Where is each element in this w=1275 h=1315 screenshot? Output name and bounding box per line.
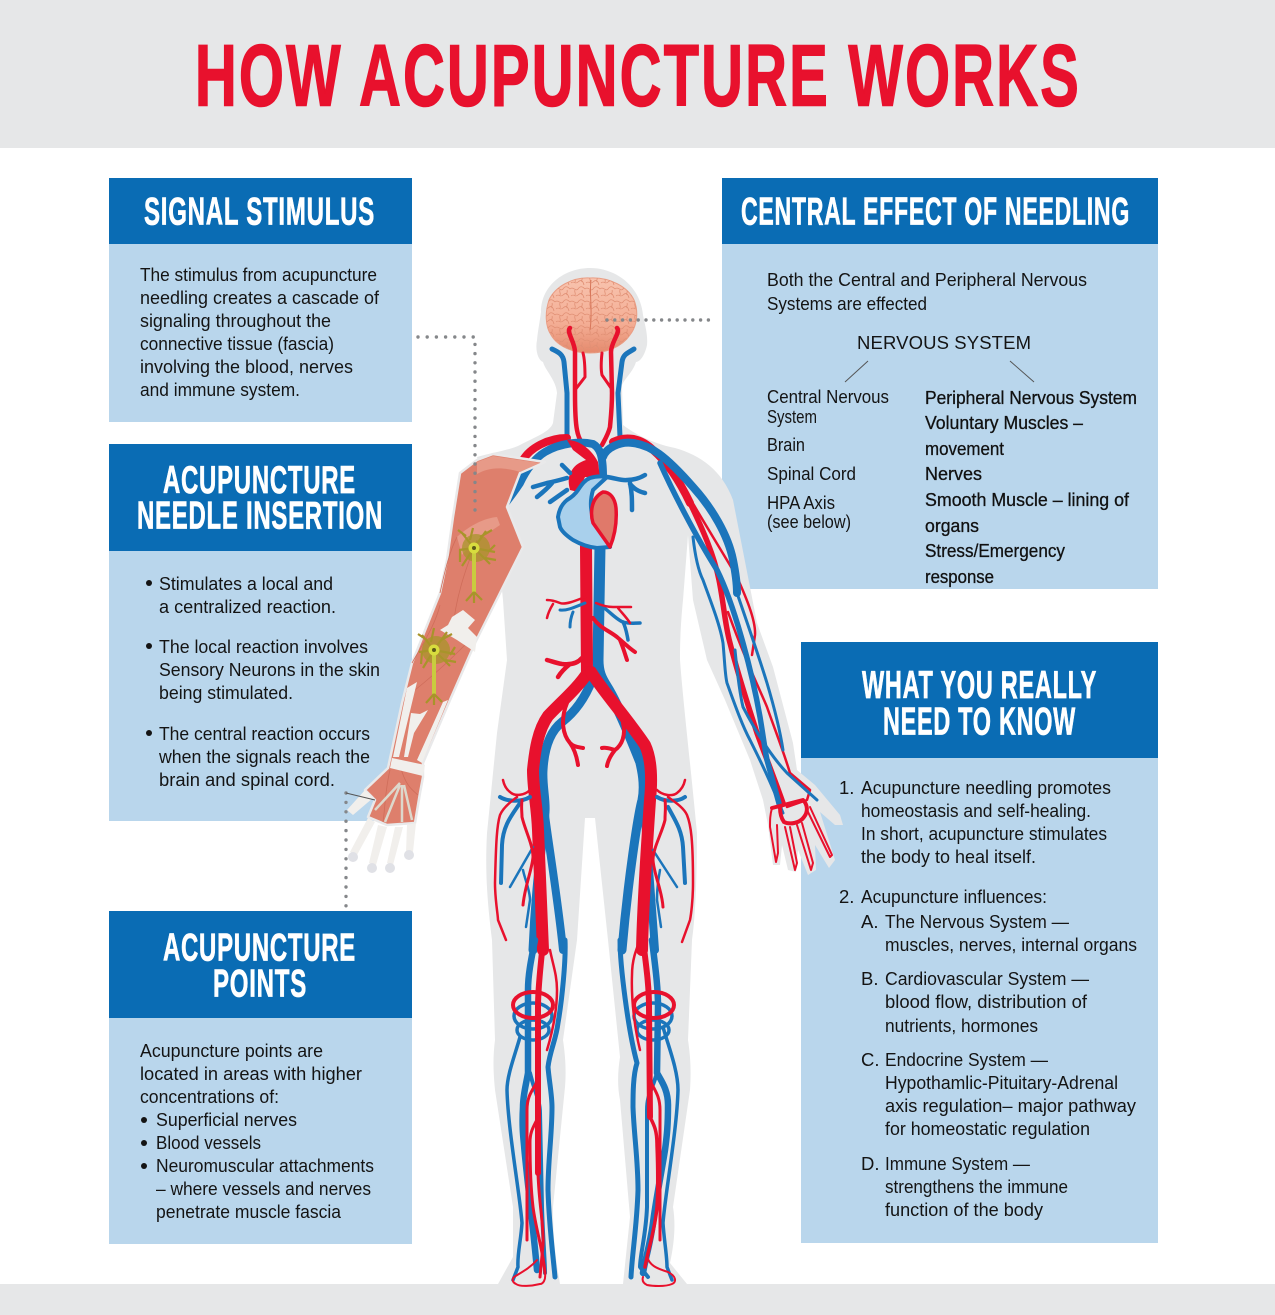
right arm blood vessels	[603, 438, 817, 813]
peripheral nervous system column: Voluntary Muscles –	[925, 412, 1084, 433]
panel body	[722, 244, 1158, 589]
numbered point 1	[839, 777, 1111, 867]
muscle silhouette	[365, 454, 545, 825]
peripheral nervous system column	[925, 387, 1137, 587]
text block: located in areas with higher	[140, 1063, 362, 1084]
text block: Acupuncture points are	[140, 1040, 323, 1061]
heading: SIGNAL STIMULUS	[144, 190, 375, 234]
text block	[140, 264, 380, 400]
central nervous system column: System	[767, 406, 817, 427]
peripheral nervous system column: Peripheral Nervous System	[925, 387, 1137, 408]
text block: – where vessels and nerves	[156, 1178, 371, 1199]
panel: signal stimulus	[109, 178, 412, 422]
peripheral nervous system column: Nerves	[925, 463, 982, 484]
diagram branch lines	[845, 361, 1034, 382]
numbered point 2: The Nervous System —	[885, 911, 1069, 932]
muscle fibre lines	[383, 537, 477, 822]
text block: concentrations of:	[140, 1086, 279, 1107]
right hand blood vessels	[770, 800, 832, 870]
numbered point 2: A.	[861, 911, 878, 932]
heading: NEED TO KNOW	[883, 700, 1076, 744]
panel body	[109, 1018, 412, 1244]
numbered point 2: nutrients, hormones	[885, 1015, 1038, 1036]
bullet list: Stimulates a local and	[159, 573, 333, 594]
numbered point 2: axis regulation– major pathway	[885, 1095, 1137, 1116]
numbered point 2: muscles, nerves, internal organs	[885, 934, 1137, 955]
nervous system diagram heading: NERVOUS SYSTEM	[857, 332, 1031, 353]
neck and head blood vessels	[552, 328, 634, 445]
numbered point 2: blood flow, distribution of	[885, 991, 1088, 1012]
numbered point 2: Acupuncture influences:	[861, 886, 1047, 907]
central nervous system column: Brain	[767, 434, 805, 455]
panel body	[801, 758, 1158, 1243]
numbered point 2: strengthens the immune	[885, 1176, 1068, 1197]
text block: and immune system.	[140, 379, 300, 400]
left ventricle	[592, 492, 616, 547]
heading	[163, 926, 356, 1006]
intro text: Systems are effected	[767, 293, 927, 314]
peripheral nervous system column: response	[925, 566, 994, 587]
text block: needling creates a cascade of	[140, 287, 380, 308]
numbered point 2: 2.	[839, 886, 854, 907]
abdominal and pelvic blood vessels	[533, 672, 655, 950]
heading: WHAT YOU REALLY	[862, 664, 1097, 707]
panel header bar	[801, 642, 1158, 758]
pulmonary veins	[533, 465, 645, 510]
aorta	[567, 440, 600, 492]
heading	[137, 459, 383, 538]
bullet list: a centralized reaction.	[159, 596, 336, 617]
bullet list: The local reaction involves	[159, 636, 368, 657]
numbered point 2: C.	[861, 1049, 880, 1070]
dotted connector: acupuncture points to hand	[346, 793, 375, 907]
panel: acupuncture points	[109, 911, 412, 1244]
central nervous system column: HPA Axis	[767, 492, 835, 513]
forearm tendons	[393, 682, 448, 763]
central nervous system column: Central Nervous	[767, 386, 889, 407]
thigh blood vessels	[495, 780, 693, 942]
numbered point 2: B.	[861, 968, 878, 989]
peripheral nervous system column: movement	[925, 438, 1004, 459]
text block: involving the blood, nerves	[140, 356, 353, 377]
numbered point 1: Acupuncture needling promotes	[861, 777, 1111, 798]
panel body	[109, 551, 412, 821]
bullet list: brain and spinal cord.	[159, 769, 335, 790]
fingertips	[348, 850, 414, 873]
panel header bar	[722, 178, 1158, 244]
torso blood vessels	[500, 438, 640, 760]
numbered point 2: function of the body	[885, 1199, 1044, 1220]
left leg blood vessels	[507, 940, 565, 1286]
human body illustration	[347, 268, 843, 1286]
elbow tendon	[440, 610, 477, 652]
text block: Neuromuscular attachments	[156, 1155, 374, 1176]
top banner background	[0, 0, 1275, 148]
central nervous system column	[767, 386, 889, 532]
heading: NEEDLE INSERTION	[137, 494, 383, 538]
heading: ACUPUNCTURE	[163, 926, 356, 970]
numbered point 1: homeostasis and self-healing.	[861, 800, 1091, 821]
panel: what you really need to know	[801, 642, 1158, 1243]
bottom band	[0, 1284, 1275, 1315]
central nervous system column: Spinal Cord	[767, 463, 856, 484]
wrist band	[390, 758, 425, 776]
muscular arm	[347, 454, 545, 873]
numbered point 2: D.	[861, 1153, 880, 1174]
icon: lower neuron	[418, 628, 456, 705]
numbered point 1: In short, acupuncture stimulates	[861, 823, 1107, 844]
heading: ACUPUNCTURE	[163, 459, 356, 502]
dotted connector: central effect to brain	[607, 318, 712, 322]
palm tendons	[375, 783, 412, 822]
panel body	[109, 244, 412, 422]
text block	[140, 1040, 374, 1222]
heading	[862, 664, 1097, 744]
panel header bar	[109, 178, 412, 244]
icon: brain	[546, 278, 637, 353]
text block: signaling throughout the	[140, 310, 331, 331]
right leg blood vessels	[620, 940, 678, 1286]
panel: acupuncture needle insertion	[109, 444, 412, 821]
text block: The stimulus from acupuncture	[140, 264, 377, 285]
numbered point 1: the body to heal itself.	[861, 846, 1036, 867]
peripheral nervous system column: organs	[925, 515, 979, 536]
right chambers	[558, 476, 610, 548]
text block: penetrate muscle fascia	[156, 1201, 342, 1222]
panel header bar	[109, 444, 412, 551]
text block: connective tissue (fascia)	[140, 333, 334, 354]
text block: Blood vessels	[156, 1132, 261, 1153]
body silhouette	[477, 268, 843, 1284]
intro text: Both the Central and Peripheral Nervous	[767, 269, 1087, 290]
bullet list: The central reaction occurs	[159, 723, 370, 744]
heading: POINTS	[213, 962, 307, 1006]
icon: heart	[533, 440, 645, 548]
central nervous system column: (see below)	[767, 511, 851, 532]
peripheral nervous system column: Smooth Muscle – lining of	[925, 489, 1130, 510]
shoulder highlight	[457, 456, 540, 555]
panel: central effect of needling	[722, 178, 1158, 589]
text block: Superficial nerves	[156, 1109, 297, 1130]
intro text	[767, 269, 1087, 314]
peripheral nervous system column: Stress/Emergency	[925, 540, 1066, 561]
bullet list: Sensory Neurons in the skin	[159, 659, 380, 680]
icon: upper neuron	[458, 528, 496, 603]
numbered point 2: for homeostatic regulation	[885, 1118, 1090, 1139]
numbered point 1: 1.	[839, 777, 854, 798]
bullet list	[146, 573, 380, 790]
numbered point 2: Hypothamlic-Pituitary-Adrenal	[885, 1072, 1118, 1093]
bullet list: being stimulated.	[159, 682, 293, 703]
fingers	[347, 790, 416, 865]
numbered point 2: Immune System —	[885, 1153, 1030, 1174]
numbered point 2: Endocrine System —	[885, 1049, 1048, 1070]
numbered point 2: Cardiovascular System —	[885, 968, 1089, 989]
dotted connector: signal stimulus to arm	[418, 337, 475, 517]
bullet list: when the signals reach the	[158, 746, 370, 767]
panel header bar	[109, 911, 412, 1018]
numbered point 2	[839, 886, 1137, 1220]
